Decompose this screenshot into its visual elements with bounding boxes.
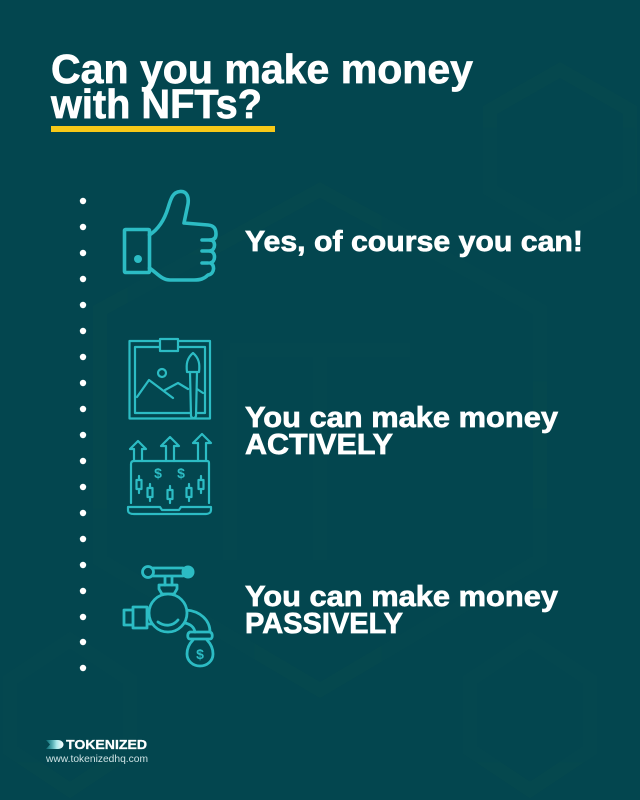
- icon: laptop with rising chart: $: [177, 465, 185, 481]
- title: Can you make money: [51, 46, 473, 92]
- answer text: passively: PASSIVELY: [245, 608, 403, 640]
- icon: tap dripping money: $: [196, 646, 204, 662]
- icon: tap dripping money: [124, 566, 213, 666]
- title: with NFTs?: [50, 81, 262, 127]
- answer text: yes: Yes, of course you can!: [245, 226, 583, 258]
- dotted timeline: [80, 198, 86, 671]
- logo mark: [46, 740, 64, 749]
- answer text: actively: ACTIVELY: [245, 429, 393, 461]
- answer text: passively: [245, 581, 558, 640]
- logo wordmark: TOKENIZED: [66, 737, 147, 752]
- icon: laptop with rising chart: $: [154, 465, 162, 481]
- answer text: actively: [245, 402, 558, 461]
- answer text: actively: You can make money: [245, 402, 558, 434]
- icon: painting with brush: [130, 339, 210, 418]
- title underline: [51, 126, 275, 132]
- title: [50, 46, 473, 127]
- icon: thumbs up: [124, 191, 216, 280]
- website url: www.tokenizedhq.com: [45, 754, 148, 765]
- icon: laptop with rising chart: [128, 434, 211, 514]
- answer text: passively: You can make money: [245, 581, 558, 613]
